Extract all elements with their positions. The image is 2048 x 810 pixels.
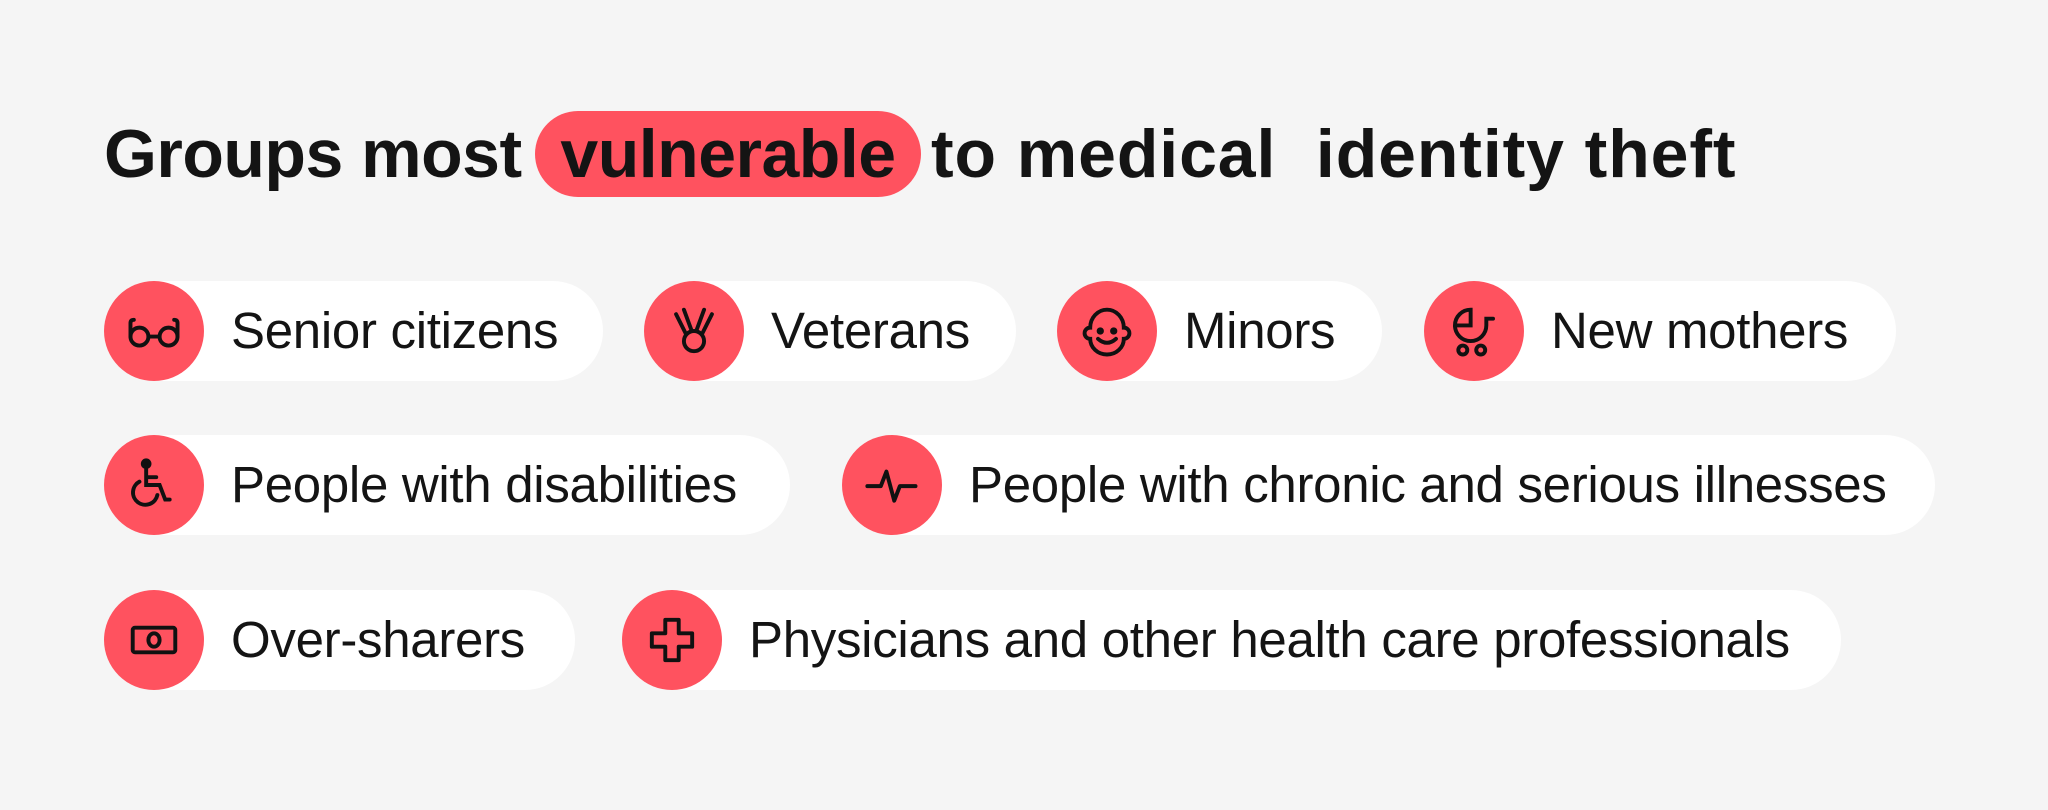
pill: chronic illnesses: People with chronic and serious illnesses [969, 456, 1887, 513]
pill: senior citizens [104, 281, 603, 381]
pill: minors [1057, 281, 1382, 381]
icon: camera/screen [104, 590, 204, 690]
pill: new mothers [1424, 281, 1896, 381]
icon: glasses [104, 281, 204, 381]
pill: chronic illnesses [842, 435, 1935, 535]
pill: physicians: Physicians and other health care professionals [749, 611, 1790, 668]
pill: veterans [644, 281, 1016, 381]
pill: veterans: Veterans [771, 302, 970, 359]
pill: over-sharers: Over-sharers [231, 611, 525, 668]
icon: medal [644, 281, 744, 381]
pill: over-sharers [104, 590, 575, 690]
icon: stroller [1424, 281, 1524, 381]
icon: baby face [1057, 281, 1157, 381]
pill: minors: Minors [1184, 302, 1335, 359]
icon: medical cross [622, 590, 722, 690]
title continued: to medical identity theft [931, 116, 1736, 192]
icon: pulse [842, 435, 942, 535]
pill: people with disabilities: People with disabilities [231, 456, 737, 513]
pill: senior citizens: Senior citizens [231, 302, 558, 359]
pill: people with disabilities [104, 435, 790, 535]
pill: physicians [622, 590, 1841, 690]
title highlight: vulnerable: vulnerable [560, 116, 896, 192]
title: Groups most [104, 116, 522, 192]
pill: new mothers: New mothers [1551, 302, 1848, 359]
icon: wheelchair [104, 435, 204, 535]
